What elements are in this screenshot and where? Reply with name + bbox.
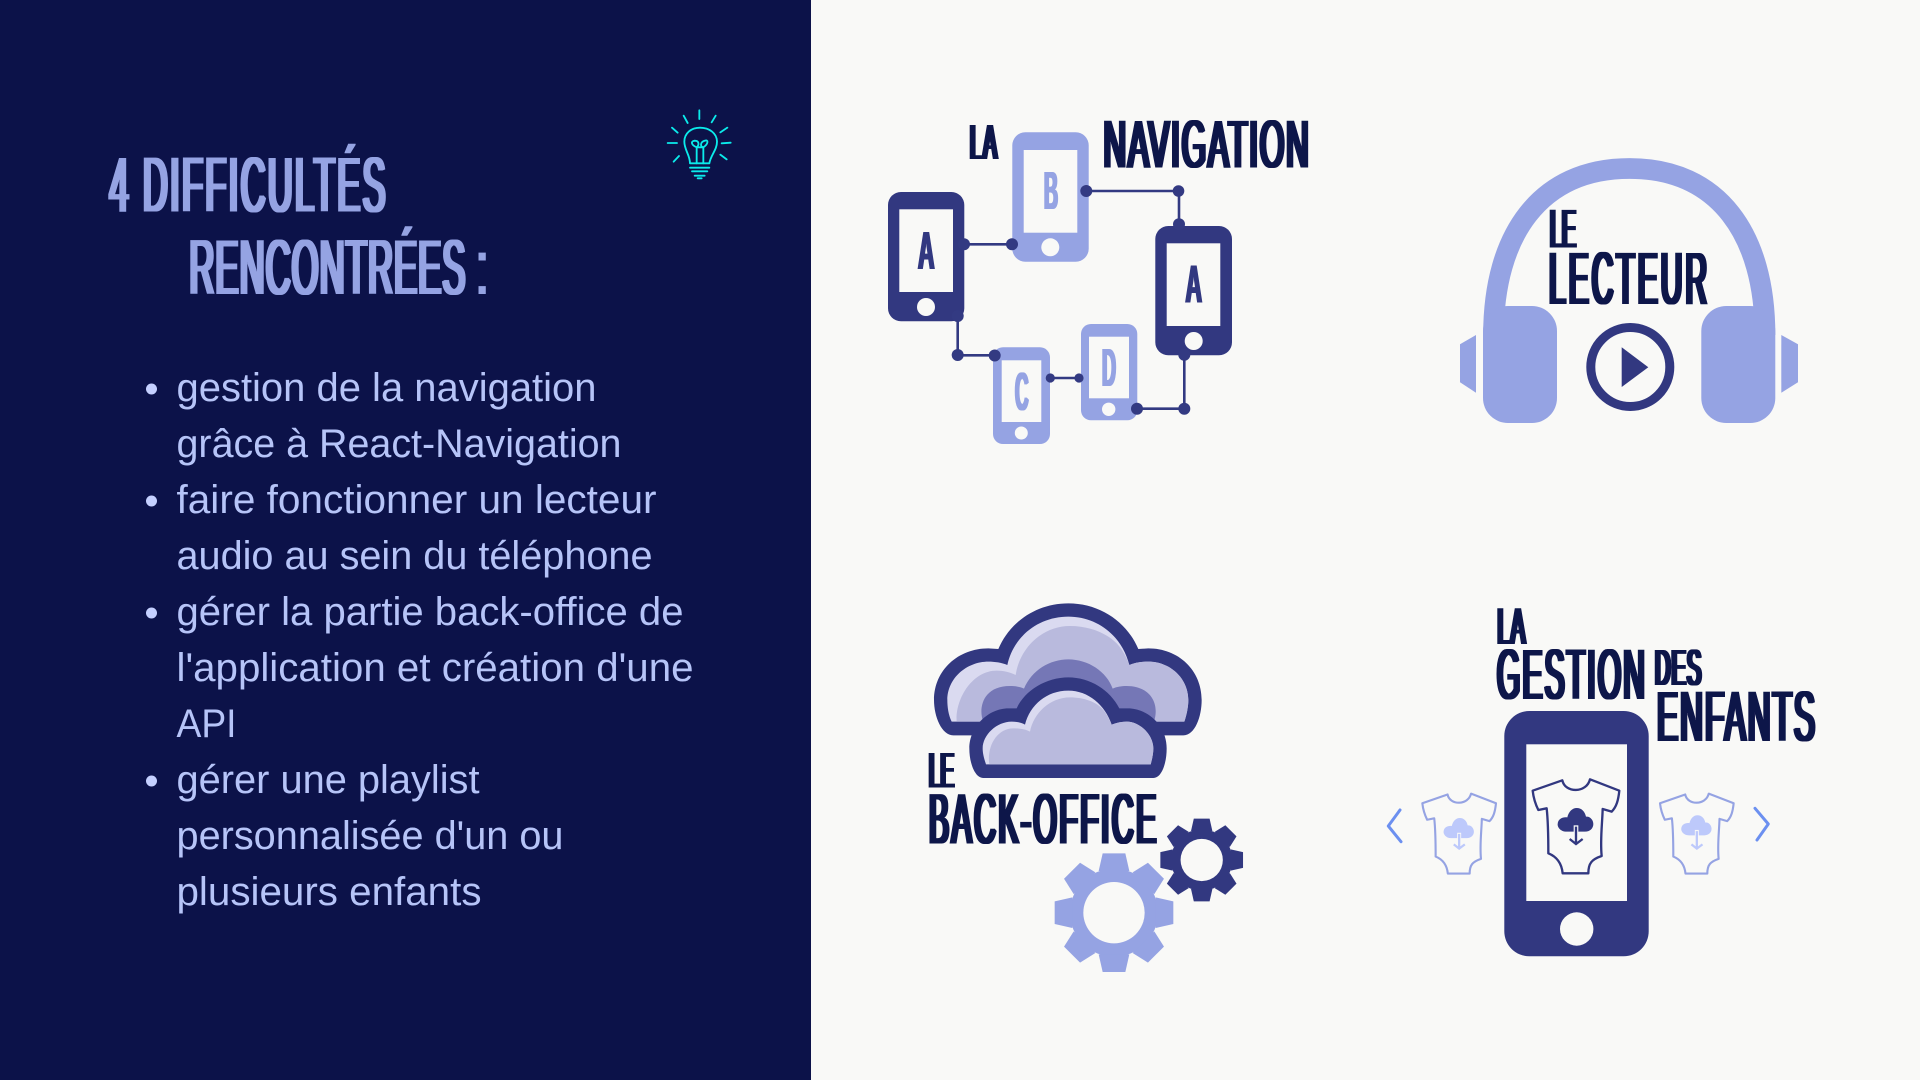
icon: left chevron [1388,810,1401,842]
icon: phone with bodysuit [1504,711,1649,956]
panel: left navy column [0,0,811,1080]
phone A left: A [918,221,934,281]
panel: le back-office [929,603,1243,972]
heading: le lecteur: LE [1550,197,1576,259]
icon: clouds [934,603,1202,778]
heading: la navigation: LA [970,115,997,169]
heading: la navigation: NAVIGATION [1104,107,1309,183]
bullet list [146,366,694,914]
bullet item: playlist [146,758,564,914]
heading: la gestion des enfants [1497,598,1815,757]
bullet item: navigation: gestion de la navigation [176,366,596,410]
icon: small gear [1160,819,1243,901]
panel: la navigation [888,107,1309,444]
phone D: D [1102,338,1116,398]
bullet item: audio player [146,478,656,578]
phone C: C [1015,362,1028,422]
icon: headphones [1460,168,1798,423]
bullet item: navigation: grâce à React-Navigation [176,422,622,466]
heading: la gestion des enfants: DES [1655,641,1701,697]
heading: la navigation [970,107,1309,183]
icon: large gear [1055,853,1173,972]
bullet item: audio player: audio au sein du téléphone [176,534,652,578]
bullet item: playlist: plusieurs enfants [176,870,482,914]
bullet item: back-office: API [176,702,236,746]
title: 4 DIFFICULTÉS [110,142,385,229]
bullet item: playlist: personnalisée d'un ou [176,814,564,858]
bullet item: back-office: l'application et création d'une [176,646,694,690]
icon: right chevron [1755,808,1768,840]
bullet item: back-office: gérer la partie back-office de [176,590,684,634]
bullet item: audio player: faire fonctionner un lecteur [176,478,656,522]
title [110,142,487,311]
icon: centre bodysuit [1533,779,1619,873]
heading: la gestion des enfants: LA [1498,598,1525,656]
phone A left [888,192,964,321]
phone A right [1155,226,1232,355]
phone A right: A [1186,255,1202,315]
connectors between phones [958,191,1184,409]
phone B [1012,132,1089,262]
icon: play button [1591,328,1670,406]
heading: la gestion des enfants: ENFANTS [1657,676,1815,757]
heading: le lecteur: LECTEUR [1549,238,1707,321]
bullet item: playlist: gérer une playlist [176,758,480,802]
bullet item: back-office [146,590,694,746]
title: RENCONTRÉES : [190,223,487,311]
panel: le lecteur [1460,168,1798,423]
phone D [1081,324,1137,420]
phone B: B [1044,161,1058,221]
icon: right bodysuit [1660,794,1734,874]
connector dots [952,185,1190,415]
panel: la gestion des enfants [1388,598,1815,956]
heading: la gestion des enfants: GESTION [1497,635,1645,715]
icon: light bulb [668,110,731,178]
heading: le lecteur [1549,197,1707,321]
icon: left bodysuit [1422,794,1496,874]
bullet item: navigation [146,366,622,466]
heading: le back-office: BACK-OFFICE [929,778,1156,859]
phone C [993,347,1050,444]
heading: le back-office: LE [929,744,954,799]
